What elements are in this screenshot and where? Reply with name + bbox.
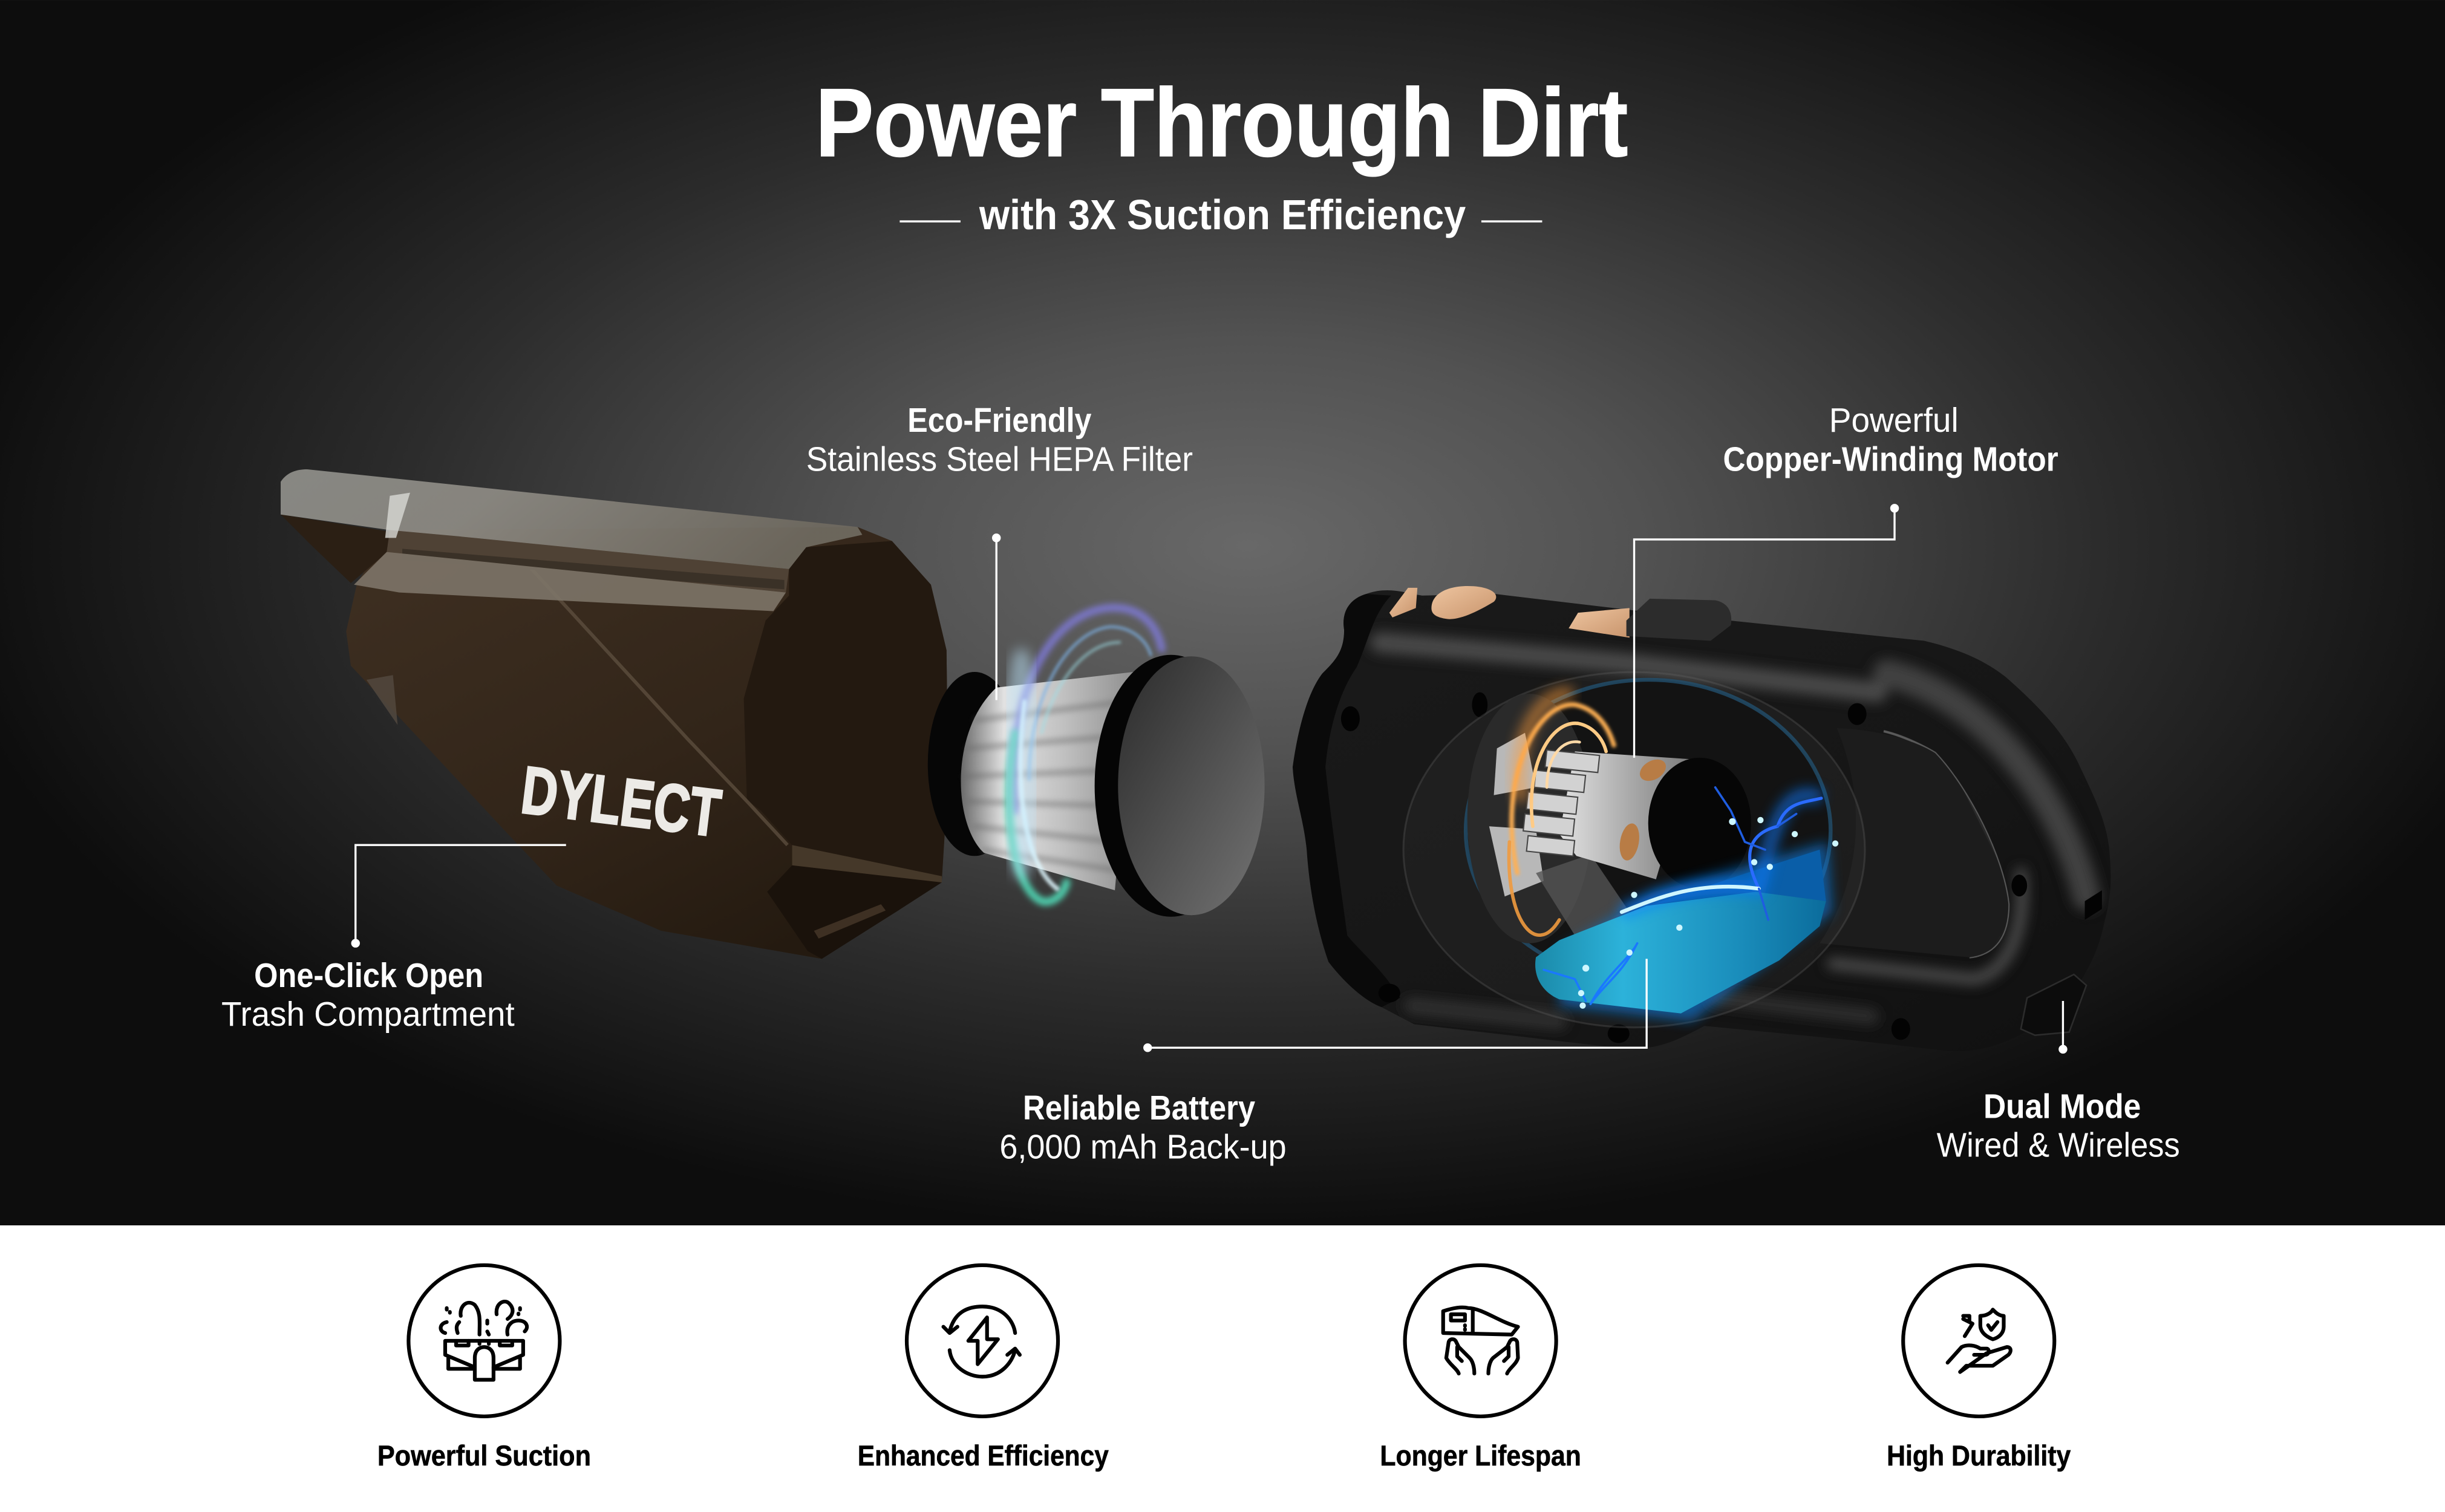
- bin lower corner: [767, 865, 942, 959]
- filter end disc rim: [1095, 655, 1247, 917]
- label: trash compartment: One-Click Open: [254, 957, 483, 995]
- label: filter: Eco-Friendly: [907, 402, 1092, 440]
- label: dual mode: Wired & Wireless: [1937, 1127, 2180, 1165]
- air swirl: [1010, 608, 1161, 902]
- motor window: [1466, 680, 1830, 982]
- vacuum main unit: [1293, 586, 2110, 1051]
- bin side panel: [744, 541, 948, 876]
- callout line: filter: [992, 533, 1001, 700]
- handle opening shade: [1809, 720, 2019, 966]
- callout line: battery: [1143, 959, 1647, 1052]
- handle inner rim line: [1884, 731, 2008, 957]
- stator disc: [1467, 694, 1592, 943]
- bin diagonal seam: [530, 567, 788, 845]
- pleat lines: [964, 702, 1126, 870]
- label: longer lifespan: Longer Lifespan: [1380, 1440, 1581, 1472]
- battery: [1535, 892, 1826, 1014]
- lightning glow: [1622, 795, 1821, 912]
- orange energy rings: [1509, 694, 1614, 935]
- filter rear ring: [928, 672, 1021, 856]
- icon: high durability: [1903, 1265, 2054, 1416]
- bin main body: [346, 527, 948, 959]
- nozzle dark mouth: [281, 515, 393, 583]
- label: enhanced efficiency: Enhanced Efficiency: [858, 1440, 1109, 1472]
- nozzle bright slit: [385, 493, 410, 538]
- label: filter: [806, 402, 1193, 479]
- label: motor: Copper-Winding Motor: [1723, 441, 2058, 479]
- motor opening: [1648, 758, 1751, 888]
- label: battery: [999, 1089, 1287, 1166]
- label: battery: Reliable Battery: [1023, 1089, 1256, 1127]
- transparent nozzle lower band: [354, 552, 786, 611]
- copper indicator strip: [1569, 608, 1630, 637]
- callout line: trash compartment: [351, 845, 566, 948]
- label: dual mode: [1937, 1087, 2180, 1165]
- label: battery: 6,000 mAh Back-up: [999, 1128, 1287, 1166]
- debris below motor: [1536, 855, 1630, 936]
- title: Power Through Dirt: [815, 68, 1628, 177]
- copper coils: [1617, 755, 1670, 862]
- transparent nozzle upper band: [281, 469, 863, 569]
- front rim band: [1293, 594, 1400, 1007]
- upper battery band: [1653, 850, 1826, 904]
- stator bright sectors: [1489, 733, 1544, 896]
- energy sparks: [1578, 817, 1838, 1009]
- rear charging port: [2021, 974, 2086, 1035]
- icon: powerful suction: [408, 1265, 560, 1416]
- icon: longer lifespan: [1405, 1265, 1556, 1416]
- icon: enhanced efficiency: [907, 1265, 1058, 1416]
- release switch: [1627, 599, 1731, 641]
- nozzle middle strip: [387, 530, 789, 593]
- callout line: dual mode: [2058, 1001, 2068, 1054]
- bin small facet: [367, 675, 397, 725]
- copper power button: [1431, 586, 1496, 619]
- copper side button: [1389, 588, 1417, 618]
- motor cylinder: [1559, 752, 1692, 879]
- lightning arcs: [1544, 787, 1821, 1004]
- label: motor: Powerful: [1829, 402, 1959, 440]
- filter pleats: [961, 672, 1134, 890]
- label: filter: Stainless Steel HEPA Filter: [806, 441, 1193, 479]
- label: high durability: High Durability: [1887, 1440, 2071, 1472]
- label: trash compartment: Trash Compartment: [221, 996, 515, 1034]
- small body screws: [1341, 692, 2102, 1043]
- label: trash compartment: [221, 957, 515, 1034]
- label: dual mode: Dual Mode: [1983, 1087, 2141, 1126]
- trash compartment product: [281, 469, 948, 959]
- handle highlights: [1293, 594, 2086, 1021]
- logo: DYLECT: [517, 753, 725, 851]
- filter end disc face: [1118, 656, 1265, 915]
- callout line: motor: [1634, 504, 1899, 758]
- HEPA filter product: [928, 608, 1265, 917]
- label: motor: [1723, 402, 2058, 479]
- vacuum body and handle: [1293, 590, 2110, 1051]
- subtitle with side rules: with 3X Suction Efficiency: [979, 191, 1466, 238]
- motor fins: [1523, 750, 1599, 856]
- blue glow behind battery: [1559, 842, 1832, 1021]
- label: powerful suction: Powerful Suction: [377, 1440, 591, 1472]
- white footer band: [0, 1225, 2445, 1512]
- translucent dome: [1403, 672, 1865, 1028]
